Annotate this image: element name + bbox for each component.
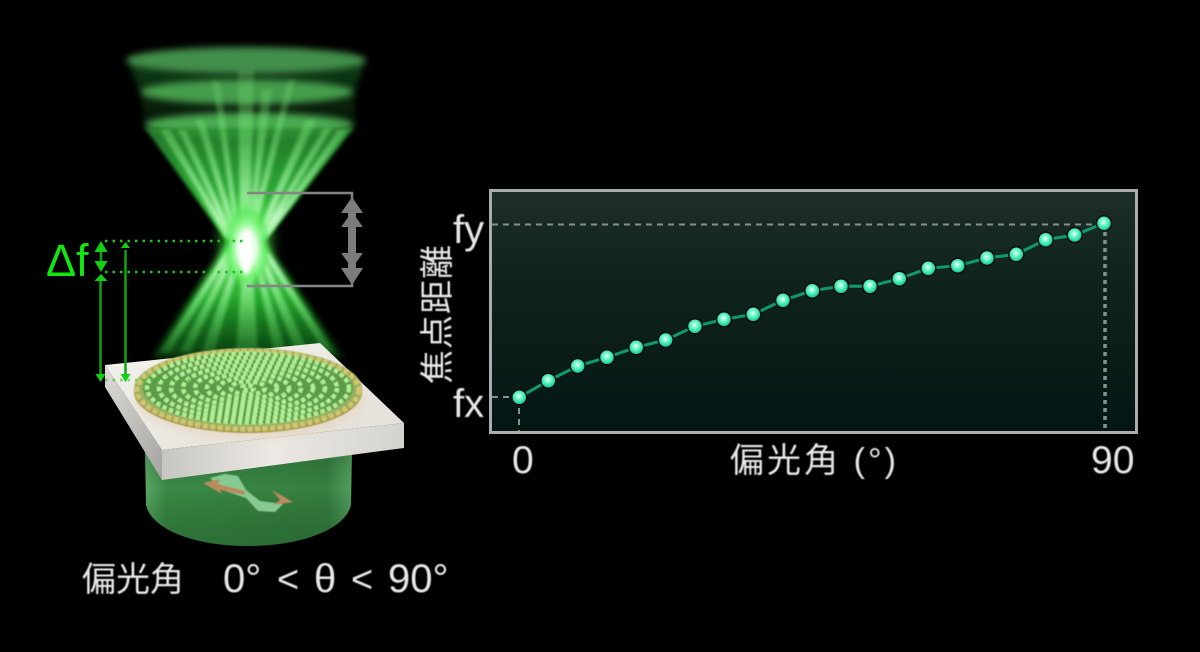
focal glow (220, 202, 272, 278)
green cylinder (145, 450, 352, 546)
caption: polarization angle: 90° (388, 557, 448, 601)
focal shift annotation (46, 235, 245, 382)
upper light rays (160, 70, 348, 240)
substrate (105, 343, 404, 480)
caption: polarization angle: < (351, 559, 373, 601)
caption: polarization angle: θ (314, 557, 336, 601)
x axis labels: 偏光角 (°) (730, 442, 896, 480)
y axis labels: fy (453, 208, 484, 252)
light beam (126, 47, 366, 358)
gray focal range bracket (247, 193, 363, 286)
x axis labels (512, 439, 1134, 482)
delta f label: Δf (46, 235, 89, 286)
dotted focal lines (105, 241, 245, 380)
icon: polarization arrow (203, 474, 293, 512)
upper light discs (126, 47, 366, 137)
y axis labels: 焦点距離 (419, 245, 457, 384)
data points (512, 216, 1112, 405)
caption: polarization angle: 0° (223, 557, 261, 601)
lower light rays (160, 252, 334, 352)
plot frame (490, 190, 1136, 432)
metalens (134, 348, 362, 433)
data line (519, 223, 1104, 397)
chart: focal distance vs polarization angle (419, 190, 1136, 482)
y axis labels: fx (453, 382, 484, 426)
reference dashed lines (492, 224, 1105, 431)
upper cone (145, 128, 354, 240)
x axis labels: 90 (1091, 439, 1134, 482)
y axis labels (419, 208, 484, 426)
caption: polarization angle: < (277, 559, 299, 601)
x axis labels: 0 (512, 439, 534, 482)
icon: gray double arrow (341, 197, 363, 285)
lower cone (152, 245, 343, 358)
lens device (105, 343, 404, 546)
green dimension arrows (94, 241, 130, 382)
caption: polarization angle (82, 557, 448, 601)
caption: polarization angle: 偏光角 (82, 561, 184, 599)
